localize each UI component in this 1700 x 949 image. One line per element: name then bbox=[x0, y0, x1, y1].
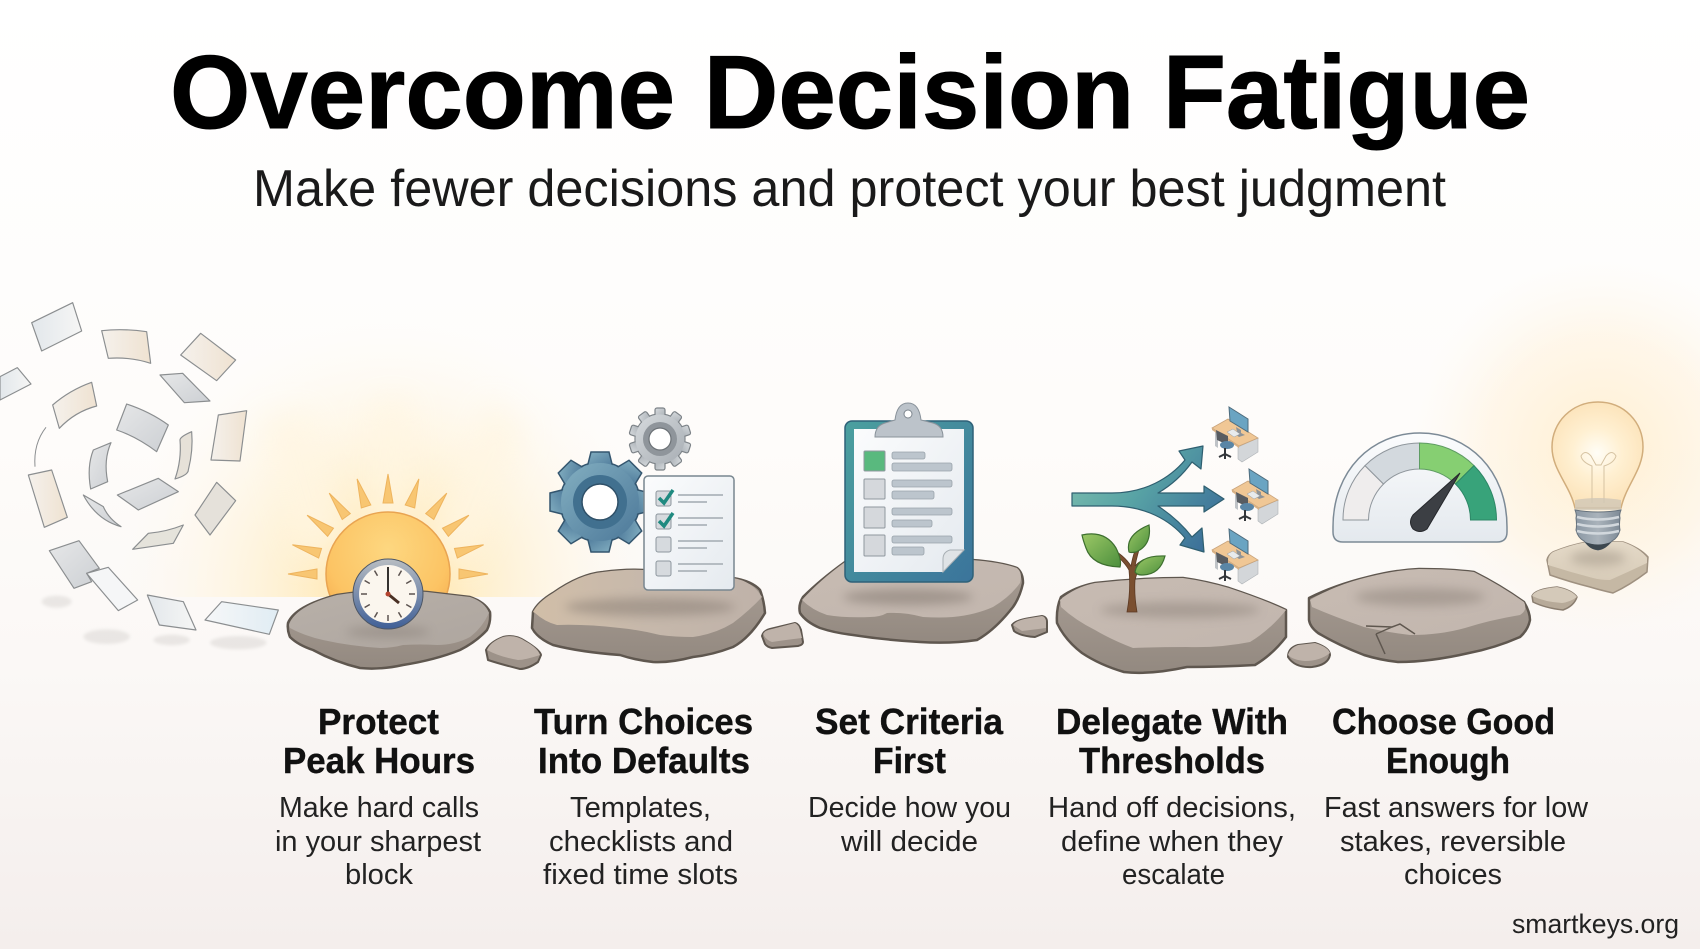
label: set criteria first: will decide bbox=[840, 826, 978, 858]
label: choose good enough: Fast answers for low bbox=[1324, 792, 1589, 824]
rock 1 bbox=[288, 591, 490, 669]
label: choose good enough: Enough bbox=[1386, 740, 1510, 781]
small stone 1 bbox=[486, 636, 541, 669]
rock 3 bbox=[799, 560, 1023, 643]
label: turn choices into defaults: checklists and bbox=[549, 826, 733, 858]
icon: blue gear bbox=[550, 452, 650, 552]
background bbox=[0, 286, 1700, 949]
icon: desks bbox=[1212, 407, 1278, 584]
label: choose good enough: stakes, reversible bbox=[1340, 826, 1566, 858]
icon: sapling bbox=[1082, 525, 1165, 612]
label: choose good enough bbox=[1324, 701, 1589, 891]
icon: swirling papers bbox=[0, 303, 278, 649]
small stone 4 bbox=[1288, 643, 1330, 667]
label: set criteria first: Decide how you bbox=[808, 792, 1011, 824]
label: delegate with thresholds bbox=[1048, 701, 1296, 891]
source credit: smartkeys.org bbox=[1512, 909, 1679, 939]
label: turn choices into defaults bbox=[534, 701, 753, 891]
label: choose good enough: Choose Good bbox=[1332, 701, 1555, 742]
rock 2 bbox=[532, 570, 765, 662]
icon: checklist bbox=[644, 476, 734, 590]
label: protect peak hours: in your sharpest bbox=[275, 826, 481, 858]
label: delegate with thresholds: escalate bbox=[1122, 859, 1225, 891]
label: set criteria first: Set Criteria bbox=[815, 701, 1004, 742]
small stone 3 bbox=[1012, 616, 1047, 637]
label: turn choices into defaults: Into Defaults bbox=[538, 740, 750, 781]
icon: light bulb bbox=[1552, 402, 1643, 550]
icon: clock bbox=[346, 559, 430, 638]
label: protect peak hours: Make hard calls bbox=[279, 792, 479, 824]
small stone 2 bbox=[762, 623, 803, 648]
label: protect peak hours: Protect bbox=[318, 701, 439, 742]
label: delegate with thresholds: Hand off decisions, bbox=[1048, 792, 1296, 824]
label: protect peak hours: block bbox=[345, 859, 413, 891]
label: delegate with thresholds: define when they bbox=[1061, 826, 1283, 858]
icon: gauge bbox=[1333, 433, 1507, 542]
label: turn choices into defaults: fixed time slots bbox=[543, 859, 738, 891]
label: turn choices into defaults: Turn Choices bbox=[534, 701, 753, 742]
rock 5 bbox=[1309, 569, 1530, 662]
subtitle: Make fewer decisions and protect your best judgment bbox=[253, 160, 1447, 218]
title: Overcome Decision Fatigue bbox=[170, 35, 1530, 151]
arrow: three-way split bbox=[1072, 446, 1224, 552]
label: delegate with thresholds: Thresholds bbox=[1079, 740, 1265, 781]
pedestal bbox=[1547, 542, 1648, 593]
icon: grey gear bbox=[629, 408, 691, 470]
label: protect peak hours bbox=[275, 701, 481, 891]
icon: clipboard bbox=[845, 403, 973, 582]
label: set criteria first bbox=[808, 701, 1011, 858]
icon: rising sun bbox=[288, 474, 488, 636]
label: delegate with thresholds: Delegate With bbox=[1056, 701, 1288, 742]
label: set criteria first: First bbox=[873, 740, 946, 781]
label: choose good enough: choices bbox=[1404, 859, 1502, 891]
label: turn choices into defaults: Templates, bbox=[570, 792, 711, 824]
small stone 5 bbox=[1532, 587, 1577, 610]
rock 4 bbox=[1057, 578, 1286, 673]
label: protect peak hours: Peak Hours bbox=[283, 740, 475, 781]
